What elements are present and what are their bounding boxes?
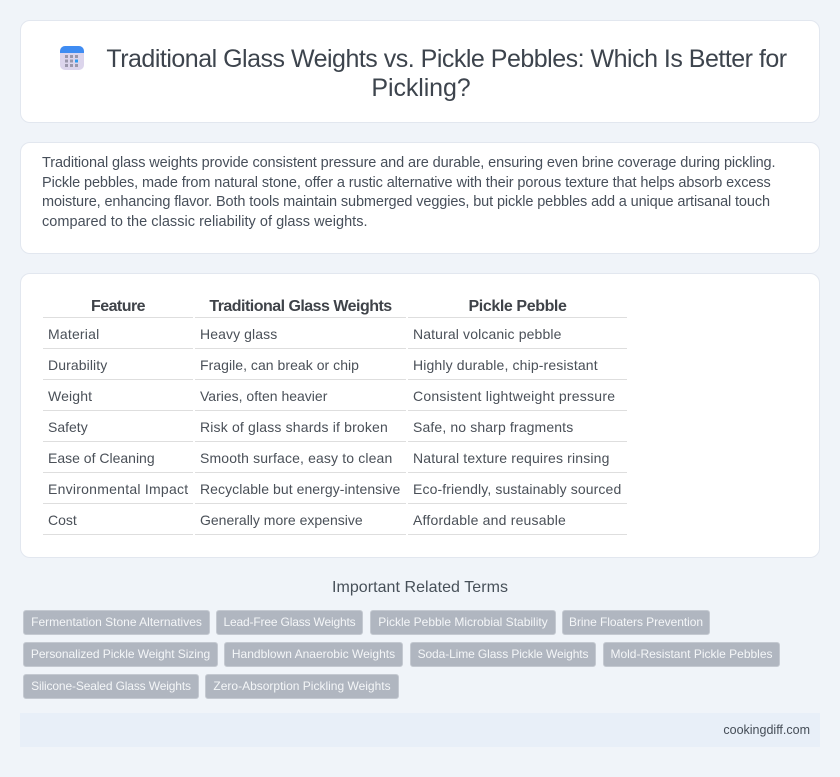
tag (224, 642, 403, 667)
table: row cost: Generally more expensive (200, 512, 363, 528)
table: row cost: Affordable and reusable (413, 512, 566, 528)
table: row material: Material (48, 326, 99, 342)
table: header (43, 298, 627, 318)
tag (603, 642, 780, 667)
tag (370, 610, 556, 635)
tag: Lead-Free Glass Weights (224, 615, 355, 629)
table: row weight: Weight (48, 388, 92, 404)
table: row safety (43, 419, 627, 442)
text: introduction: moisture, enhancing flavor. Both tools maintain submerged veggies, but pickle pebbles add a unique artisanal touch (42, 194, 770, 210)
table: row ease of cleaning: Ease of Cleaning (48, 450, 155, 466)
text: introduction: Traditional glass weights provide consistent pressure and are durable, ensuring even brine coverage during pickling. (42, 155, 775, 171)
tag: Zero-Absorption Pickling Weights (213, 679, 391, 693)
tag (23, 674, 199, 699)
icon: calendar (60, 46, 84, 70)
tag: Handblown Anaerobic Weights (232, 647, 395, 661)
text: introduction (42, 155, 775, 230)
table: row cost (43, 512, 627, 535)
table: row environmental impact: Environmental Impact (48, 481, 188, 497)
tag: Brine Floaters Prevention (569, 615, 703, 629)
table: row ease of cleaning (43, 450, 627, 473)
heading: title line two: Pickling? (371, 74, 471, 102)
tag: Personalized Pickle Weight Sizing (31, 647, 210, 661)
table: row environmental impact (43, 481, 627, 504)
table: row durability: Fragile, can break or chip (200, 357, 359, 373)
table: row material: Natural volcanic pebble (413, 326, 562, 342)
table: row weight: Varies, often heavier (200, 388, 327, 404)
table: row material (43, 326, 627, 349)
tag (562, 610, 710, 635)
footer (20, 713, 820, 747)
text: introduction: compared to the classic reliability of glass weights. (42, 214, 368, 230)
table: row ease of cleaning: Natural texture requires rinsing (413, 450, 610, 466)
panel: introduction (20, 142, 820, 254)
panel: title (20, 20, 820, 123)
heading: important related terms: Important Related Terms (332, 579, 508, 596)
tag (23, 610, 210, 635)
tag (216, 610, 363, 635)
table: row environmental impact: Eco-friendly, sustainably sourced (413, 481, 621, 497)
tag: Fermentation Stone Alternatives (31, 615, 202, 629)
table: row weight: Consistent lightweight pressure (413, 388, 615, 404)
table: row durability: Durability (48, 357, 107, 373)
table: header: Feature (91, 298, 145, 315)
table: row durability (43, 357, 627, 380)
table: row weight (43, 388, 627, 411)
tag (410, 642, 596, 667)
table: row safety: Safety (48, 419, 88, 435)
tag: Soda-Lime Glass Pickle Weights (418, 647, 588, 661)
tag: Mold-Resistant Pickle Pebbles (610, 647, 773, 661)
table: row cost: Cost (48, 512, 77, 528)
tags: related terms (23, 610, 780, 699)
tag: Silicone-Sealed Glass Weights (31, 679, 191, 693)
text: introduction: Pickle pebbles, made from natural stone, offer a rustic alternative with their porous texture that helps absorb excess (42, 175, 771, 191)
table: row safety: Risk of glass shards if broken (200, 419, 388, 435)
tag (23, 642, 218, 667)
table: row durability: Highly durable, chip-resistant (413, 357, 598, 373)
text: footer source: cookingdiff.com (723, 723, 810, 737)
panel: comparison table (20, 273, 820, 558)
table: row ease of cleaning: Smooth surface, easy to clean (200, 450, 392, 466)
table: header: Pickle Pebble (469, 298, 566, 315)
tag (205, 674, 399, 699)
heading: title line one: Traditional Glass Weights vs. Pickle Pebbles: Which Is Better for (106, 45, 787, 73)
table: row material: Heavy glass (200, 326, 277, 342)
table: header: Traditional Glass Weights (209, 298, 392, 315)
table: row environmental impact: Recyclable but energy-intensive (200, 481, 400, 497)
tag: Pickle Pebble Microbial Stability (378, 615, 548, 629)
table: row safety: Safe, no sharp fragments (413, 419, 573, 435)
